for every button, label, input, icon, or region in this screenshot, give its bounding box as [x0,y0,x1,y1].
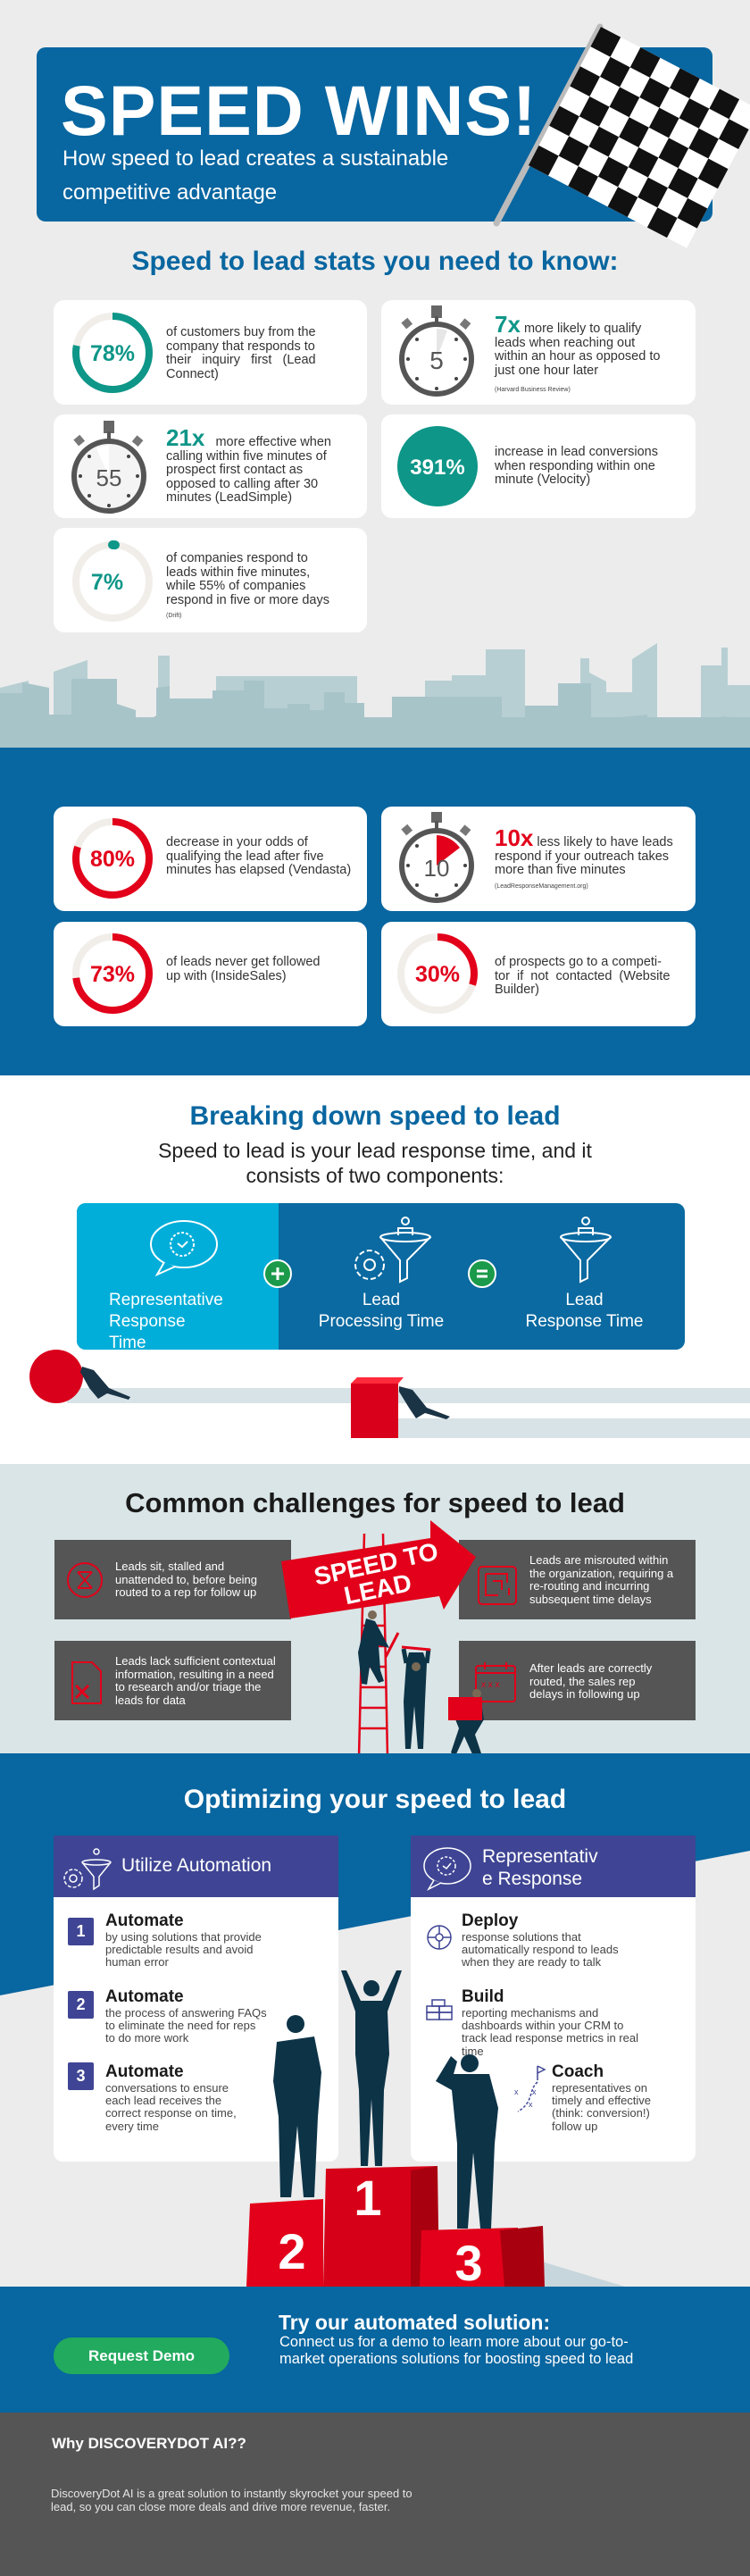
box: lead response time: Lead [565,1291,604,1309]
panel: footer [0,2413,750,2576]
panel: blue stats [0,748,750,1075]
box: lead processing time: Processing Time [319,1312,444,1331]
subtitle: How speed to lead creates a sustainable [62,146,448,171]
card: representative response: (think: conversion!) [552,2106,650,2120]
text: minute (Velocity) [495,473,590,487]
text: respond in five or more days [166,593,329,607]
text [166,424,331,505]
text: calling within five minutes of [166,448,327,463]
card: utilize automation [54,1836,338,2162]
card: utilize automation: to eliminate the need for reps [105,2019,255,2032]
icon: equals [468,1259,496,1288]
card: 10x [381,807,696,911]
card: representative response: dashboards within your CRM to [462,2019,623,2032]
subtitle: Speed to lead is your lead response time, and it [158,1139,592,1162]
card: 30%: tor if not contacted (Website [495,968,670,983]
road illustration [29,1350,750,1438]
card: representative response: Coach [552,2062,604,2081]
challenge: stalled [54,1540,291,1619]
footer text [51,2487,412,2513]
card: 80%: decrease in your odds of [166,835,308,849]
challenge: misrouted: subsequent time delays [529,1592,652,1606]
card: 73% [54,922,367,1026]
item coach: x [532,2087,537,2096]
card: representative response: timely and effective [552,2094,651,2107]
subtitle: competitive advantage [62,180,277,205]
challenge: lack info: leads for data [115,1694,186,1706]
title: SPEED WINS! [61,71,537,150]
card: 10x: respond if your outreach takes [495,849,669,863]
challenge: lack info: to research and/or triage the [115,1680,261,1694]
card: representative response: response solutions that [462,1930,581,1944]
challenge: stalled: unattended to, before being [115,1572,257,1586]
card: 30% [381,922,696,1026]
illustration: ladder and figures [281,1520,484,1753]
item coach [514,2065,546,2112]
text [495,445,658,487]
challenge: stalled: Leads sit, stalled and [115,1560,224,1573]
icon: teal circle 391% [397,426,478,506]
box: representative response time [77,1203,279,1350]
card: 7x [381,300,696,405]
card: 10x: more than five minutes [495,863,626,877]
item 1: 1 [76,1922,86,1940]
heading: Breaking down speed to lead [189,1101,561,1131]
text: (Harvard Business Review) [495,387,571,393]
card: 78% [54,300,367,405]
card: utilize automation: every time [105,2120,159,2133]
illustration: ladder and figures: LEAD [342,1568,414,1610]
panel: CTA [0,2287,750,2413]
card header: e Response [482,1869,582,1889]
icon: checkered flag [493,23,750,248]
card: 10x: (LeadResponseManagement.org) [495,882,588,890]
panel: challenges [0,1464,750,1753]
card header: Utilize Automation [121,1855,271,1876]
card: utilize automation: Automate [105,2062,184,2081]
item 3: 3 [76,2067,86,2085]
text [166,551,329,619]
card: 80% [54,807,367,911]
text: increase in lead conversions [495,445,658,459]
CTA text [279,2334,633,2367]
panel: breaking down (white) [0,1075,750,1464]
subtitle: consists of two components: [246,1164,504,1187]
item 1 [68,1918,94,1945]
heading: Common challenges for speed to lead [125,1487,625,1518]
card: 10x: 10 [424,855,449,882]
icon: plus [263,1259,292,1288]
text: prospect first contact as [166,463,303,477]
podium with figures: 1 [354,2170,382,2226]
card: utilize automation: conversations to ensure [105,2081,229,2095]
challenge: delays: After leads are correctly [529,1661,652,1675]
icon: stopwatch 55: 55 [96,464,121,491]
card: utilize automation: each lead receives the [105,2094,221,2107]
card: representative response: Deploy [462,1911,518,1930]
donut 7%: 7% [91,570,123,595]
item build [426,1999,453,2020]
card: 73%: of leads never get followed [166,955,320,969]
text: opposed to calling after 30 [166,477,318,491]
text: of customers buy from the [166,325,316,339]
CTA heading: Try our automated solution: [279,2311,550,2334]
card: 73%: up with (InsideSales) [166,968,287,983]
challenge: misrouted: the organization, requiring a [529,1567,673,1579]
card: representative response: when they are ready to talk [462,1955,601,1969]
panel: optimizing [0,1753,750,2287]
text: minutes (LeadSimple) [166,490,292,505]
heading: Optimizing your speed to lead [184,1785,566,1814]
challenge: misrouted: re-routing and incurring [529,1579,649,1593]
card: utilize automation: to do more work [105,2031,188,2045]
challenge: lack info: Leads lack sufficient contextual [115,1654,276,1668]
item deploy [427,1925,452,1950]
card: representative response: Build [462,1987,504,2006]
challenge: delays [459,1641,696,1720]
donut 78% [72,313,153,393]
challenge: delays: x x x [481,1680,500,1690]
card header [411,1836,696,1897]
item coach: x [514,2087,519,2096]
challenge: misrouted [459,1540,696,1619]
card: 73%: 73% [90,962,135,987]
card: 10x: 10x less likely to have leads [495,824,673,851]
challenge: lack info: information, resulting in a need [115,1667,274,1681]
podium with figures: 2 [278,2223,306,2279]
box: lead processing time [319,1217,444,1331]
CTA text: Connect us for a demo to learn more about our go-to- [279,2334,629,2350]
card: representative response [411,1836,696,2162]
card: utilize automation: correct response on time, [105,2106,237,2120]
man 3 [436,2054,498,2229]
icon: stopwatch 5: 5 [429,347,444,374]
woman 1 [341,1970,402,2166]
card: representative response: follow up [552,2120,597,2133]
card: utilize automation: the process of answering FAQs [105,2006,267,2020]
donut 7% [72,540,153,622]
icon: teal circle 391%: 391% [410,456,465,480]
man 2 [273,2015,321,2197]
subtitle [158,1139,592,1187]
card: 21x [54,414,367,518]
donut 78%: 78% [90,341,135,366]
text: when responding within one [495,459,655,473]
card: representative response: automatically respond to leads [462,1943,619,1956]
item 2 [68,1991,94,2019]
card header: Representativ [482,1846,598,1867]
card: utilize automation: Automate [105,1911,184,1930]
challenge: lack info [54,1641,291,1720]
box: lead response time [525,1217,643,1331]
card: representative response: track lead response metrics in real [462,2031,638,2045]
text [495,311,660,393]
box: representative response time: Response [109,1312,186,1331]
card: utilize automation: predictable results and avoid [105,1943,254,1956]
box: lead processing time: Lead [362,1291,400,1309]
item coach: x [529,2100,533,2109]
CTA text: market operations solutions for boosting speed to lead [279,2351,633,2367]
card: utilize automation: human error [105,1955,169,1969]
card: representative response: reporting mechanisms and [462,2006,598,2020]
button: request demo [54,2338,229,2374]
card: representative response: time [462,2045,484,2058]
text: while 55% of companies [166,579,305,593]
card: 30%: Builder) [495,983,539,997]
challenge: delays: routed, the sales rep [529,1674,636,1688]
challenge: delays: delays in following up [529,1687,640,1701]
box: lead response time: Response Time [525,1312,643,1331]
challenge: stalled: routed to a rep for follow up [115,1585,256,1599]
item 3 [68,2062,94,2090]
card: 391% [381,414,696,518]
card header [54,1836,338,1897]
card: 80%: 80% [90,847,135,872]
footer text: DiscoveryDot AI is a great solution to instantly skyrocket your speed to [51,2487,412,2500]
subtitle [62,146,448,205]
footer text: lead, so you can close more deals and drive more revenue, faster. [51,2500,390,2513]
card: 30%: 30% [415,962,460,987]
card: utilize automation: Automate [105,1987,184,2006]
heading: stats: Speed to lead stats you need to know: [131,247,619,276]
item 2: 2 [76,1995,86,2013]
text: leads within five minutes, [166,565,310,579]
text: company that responds to [166,339,315,354]
text: 7x more likely to qualify [495,311,641,338]
text [166,325,316,381]
icon: stopwatch 5 [399,305,474,397]
text: Connect) [166,366,219,381]
skyline [0,643,750,748]
box: representative response time: Representative [109,1291,223,1309]
illustration: ladder and figures: SPEED TO [312,1537,440,1591]
icon: stopwatch 55 [71,421,146,514]
card: 30%: of prospects go to a competi- [495,955,662,969]
header banner [37,47,712,222]
equation boxes [77,1203,685,1350]
button: request demo: Request Demo [88,2347,195,2364]
text: 21x more effective when [166,424,331,451]
challenge: misrouted: Leads are misrouted within [529,1553,668,1567]
text: of companies respond to [166,551,308,565]
card: representative response: representatives on [552,2081,647,2095]
footer heading: Why DISCOVERYDOT AI?? [52,2435,246,2452]
text: (Drift) [166,613,182,619]
card: utilize automation: by using solutions that provide [105,1930,262,1944]
card: 80%: minutes has elapsed (Vendasta) [166,863,351,877]
text: leads when reaching out [495,336,635,350]
text: their inquiry first (Lead [166,353,316,367]
text: just one hour later [495,363,598,377]
text: within an hour as opposed to [495,349,660,364]
card: 80%: qualifying the lead after five [166,849,324,863]
card: 7% [54,528,367,632]
podium with figures [246,1970,625,2287]
